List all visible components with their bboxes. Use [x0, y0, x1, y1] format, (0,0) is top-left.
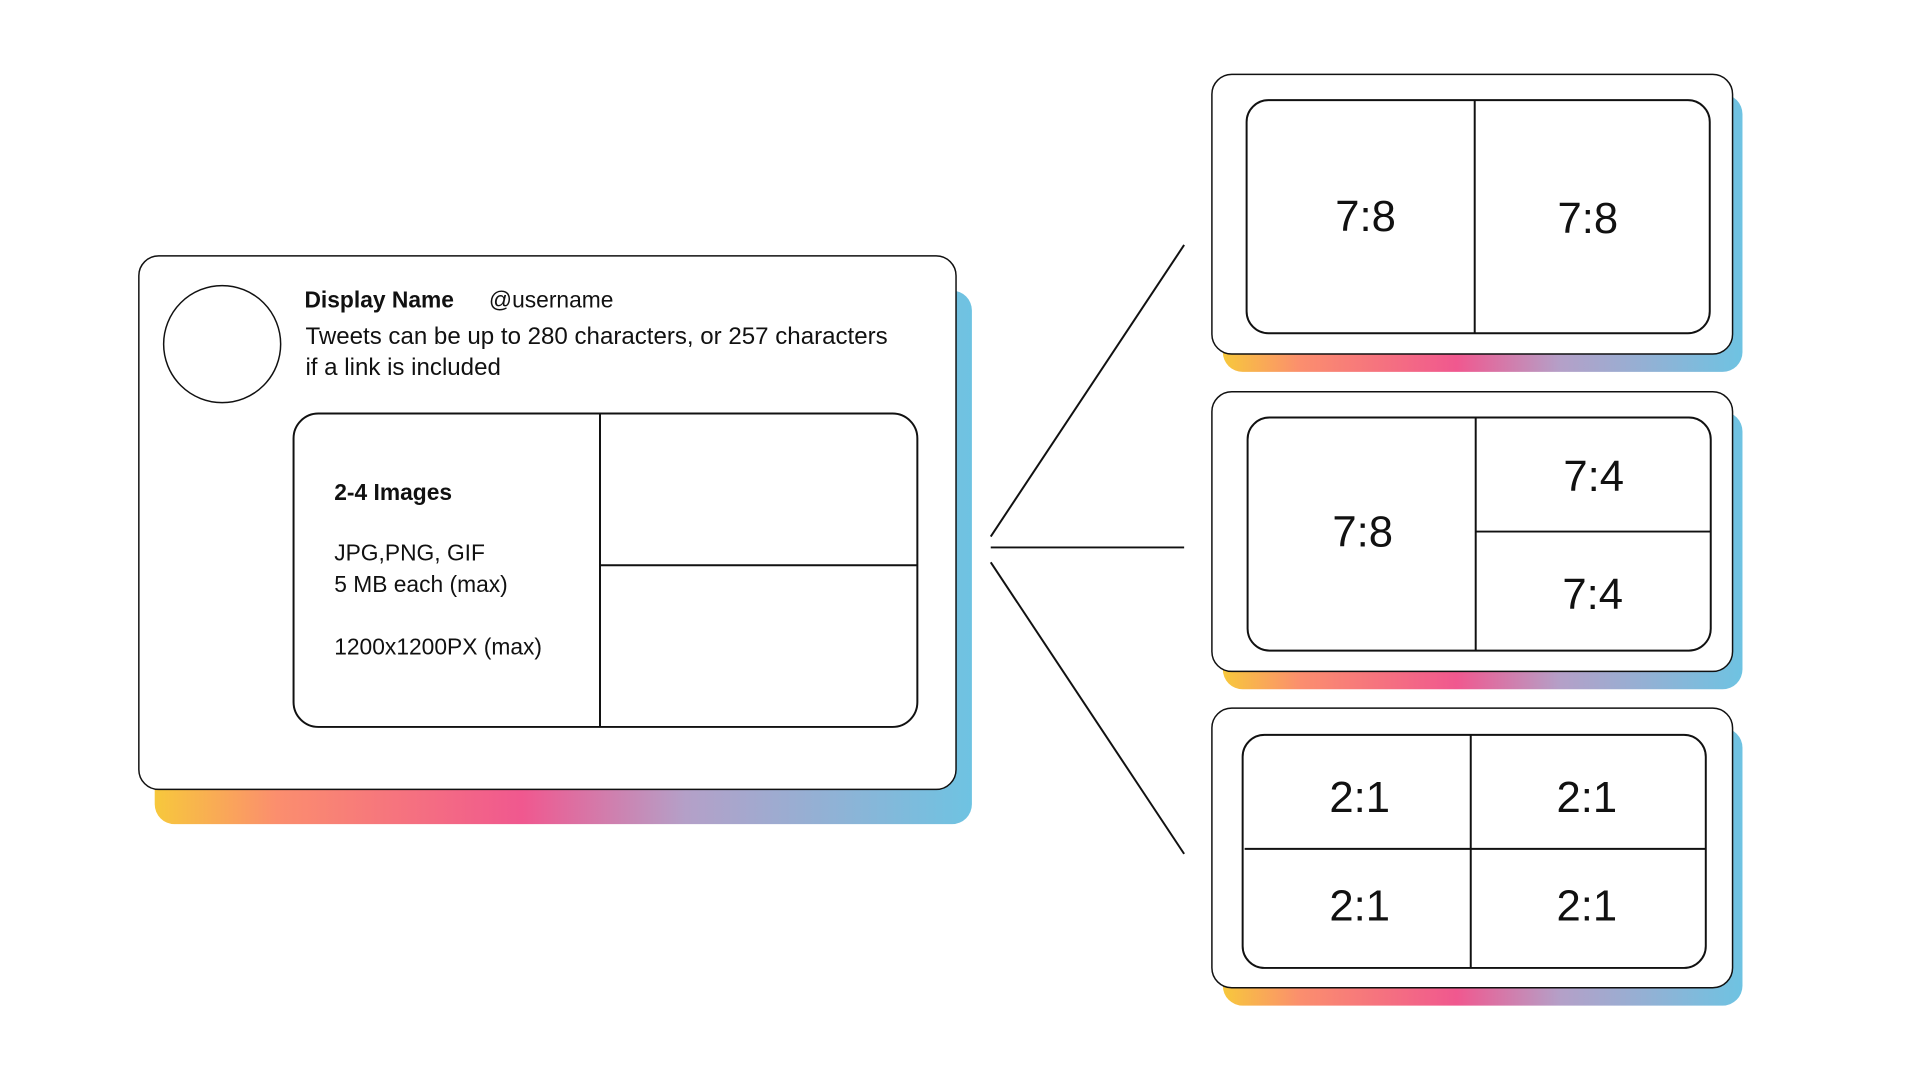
panel: 4 images layout	[1212, 708, 1742, 1006]
panel: 4 images layout: 2:1	[1556, 774, 1617, 822]
panel: 4 images layout: 2:1	[1329, 882, 1390, 930]
panel: tweet card	[139, 256, 972, 824]
panel: image grid	[294, 414, 917, 727]
panel: 4 images layout: 2:1	[1329, 774, 1390, 822]
panel: 2 images layout: 7:8	[1557, 195, 1618, 243]
text block: tweet text: Tweets can be up to 280 characters, or 257 characters	[305, 323, 888, 350]
panel: 4 images layout: 2:1	[1556, 882, 1617, 930]
text block: image specs: 1200x1200PX (max)	[334, 634, 542, 660]
panel: 2 images layout: 7:8	[1335, 193, 1396, 241]
panel: 3 images layout	[1212, 392, 1742, 689]
heading: display name: @username	[489, 286, 613, 312]
text block: tweet text: if a link is included	[305, 354, 501, 381]
arrow: connector lines	[991, 245, 1184, 854]
panel: 3 images layout: 7:4	[1562, 571, 1623, 619]
panel: 3 images layout: 7:8	[1332, 508, 1393, 556]
panel: 2 images layout	[1212, 74, 1742, 372]
text block: image specs: 2-4 Images	[334, 479, 452, 505]
icon: avatar circle	[164, 286, 281, 403]
text block: image specs: 5 MB each (max)	[334, 571, 508, 597]
panel: 3 images layout: 7:4	[1563, 453, 1624, 501]
text block: image specs: JPG,PNG, GIF	[334, 539, 485, 565]
heading: display name: Display Name	[304, 286, 454, 312]
